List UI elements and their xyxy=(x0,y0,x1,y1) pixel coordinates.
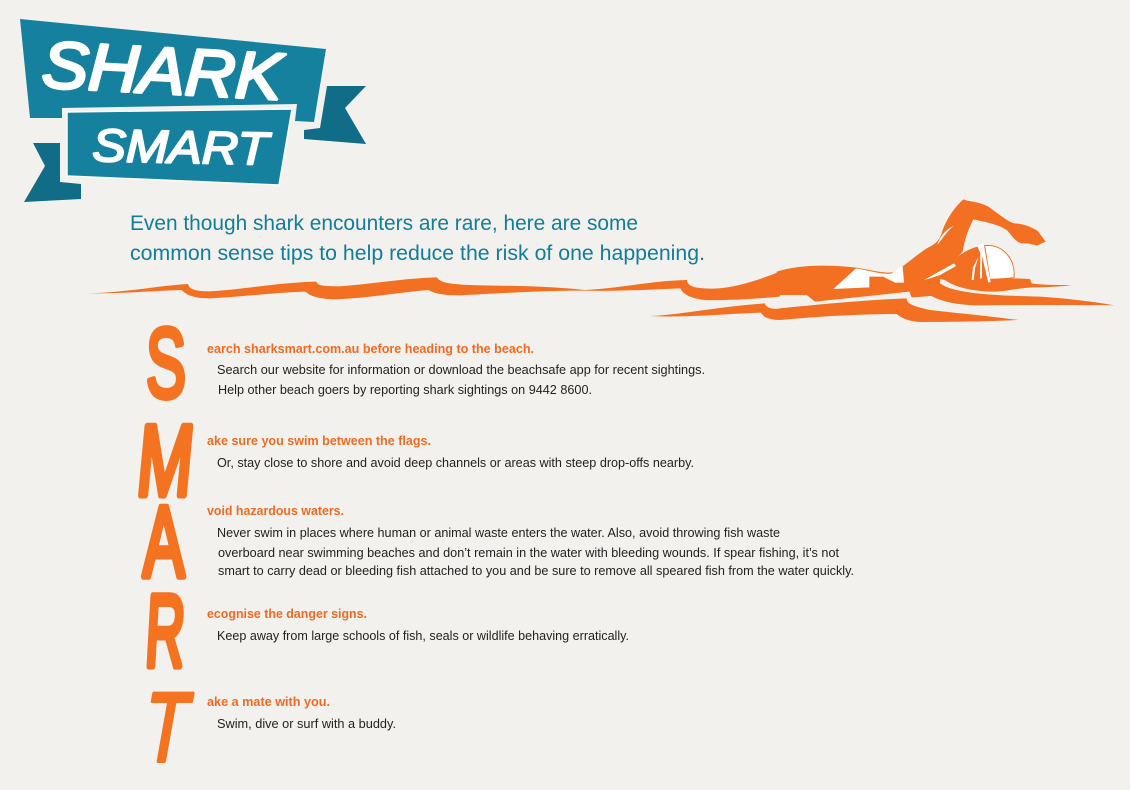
tip 2: ake sure you swim between the flags. xyxy=(207,433,431,448)
logo word SHARK: SHARK xyxy=(40,27,287,114)
head and chin xyxy=(937,246,1072,292)
swimsuit highlight xyxy=(833,266,904,289)
tip 1 xyxy=(207,341,705,397)
letter R: R xyxy=(143,575,188,688)
intro text: Even though shark encounters are rare, here are some xyxy=(130,212,638,235)
tip 2: Or, stay close to shore and avoid deep channels or areas with steep drop-offs nearby. xyxy=(217,455,694,470)
banner upper panel xyxy=(20,19,326,122)
tip 4: Keep away from large schools of fish, seals or wildlife behaving erratically. xyxy=(217,628,629,643)
tip 3: void hazardous waters. xyxy=(207,503,344,518)
tip 4 xyxy=(207,606,629,643)
swimmer body and arm xyxy=(777,199,1046,302)
tip 5: Swim, dive or surf with a buddy. xyxy=(217,716,396,731)
logo word SMART: SMART xyxy=(92,119,272,175)
arm pit highlight xyxy=(924,263,956,280)
tip 5: ake a mate with you. xyxy=(207,694,330,709)
tip 3: Never swim in places where human or animal waste enters the water. Also, avoid throwing fish waste xyxy=(217,525,780,540)
intro text xyxy=(130,212,705,265)
tip 1: Search our website for information or download the beachsafe app for recent sightings. xyxy=(217,362,705,377)
swim cap xyxy=(985,245,1014,279)
letter A: A xyxy=(143,486,185,598)
tip 3: smart to carry dead or bleeding fish attached to you and be sure to remove all speared fish from the water quickly. xyxy=(218,563,854,578)
logo: Shark Smart banner xyxy=(20,19,366,202)
tip 1: earch sharksmart.com.au before heading to the beach. xyxy=(207,341,534,356)
tip 2 xyxy=(207,433,694,470)
wave: long upper wave xyxy=(88,272,780,300)
muscle highlight xyxy=(937,226,954,245)
banner lower panel xyxy=(67,109,292,185)
tip 3 xyxy=(207,503,854,578)
ear detail xyxy=(972,257,979,280)
body water stream xyxy=(912,279,1114,305)
tip 3: overboard near swimming beaches and don’t remain in the water with bleeding wounds. If spear fishing, it’s not xyxy=(218,545,839,560)
intro text: common sense tips to help reduce the risk of one happening. xyxy=(130,242,705,265)
banner right tail xyxy=(304,86,366,144)
lower wave xyxy=(650,298,1018,322)
tip 1: Help other beach goers by reporting shark sightings on 9442 8600. xyxy=(218,382,592,397)
swimmer and waves illustration xyxy=(88,199,1114,322)
letter M: M xyxy=(133,406,198,517)
letter S: S xyxy=(146,309,186,419)
tip 4: ecognise the danger signs. xyxy=(207,606,367,621)
tip 5 xyxy=(207,694,396,731)
letter T: T xyxy=(136,673,198,783)
banner left tail xyxy=(24,143,81,202)
cap strap xyxy=(977,243,991,283)
